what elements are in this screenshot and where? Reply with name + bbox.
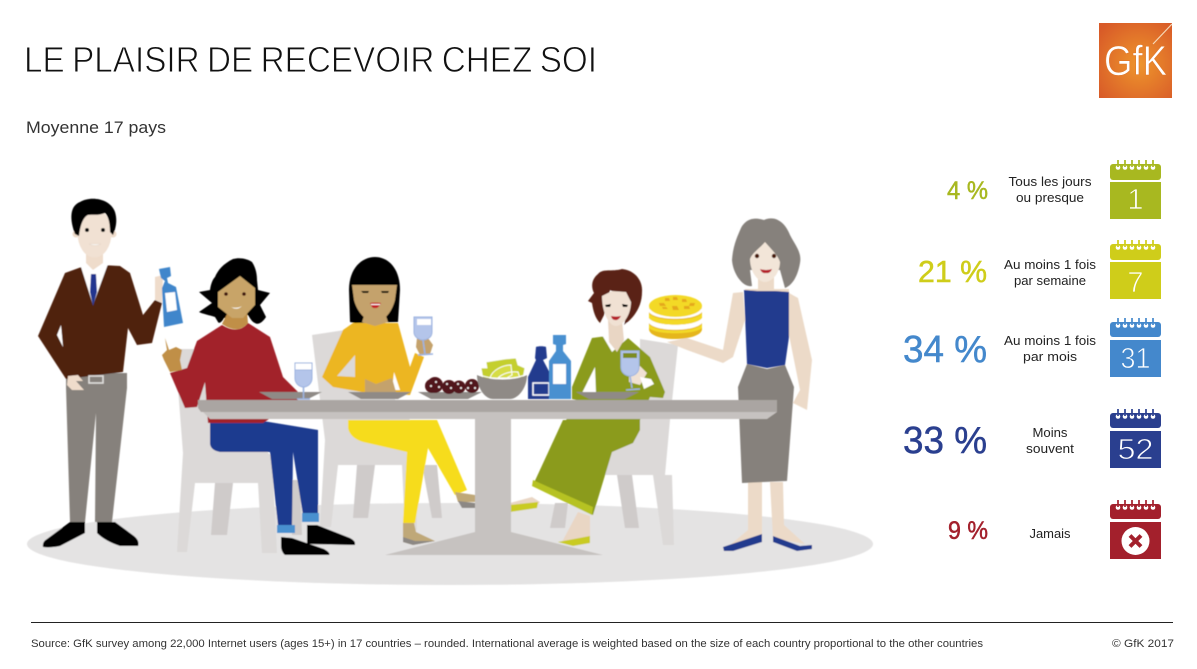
stat row: 34 % au moins 1 fois par mois: Au moins 1 fois	[1004, 333, 1097, 348]
stat row: 4 % tous les jours	[947, 160, 1161, 219]
logo: GfK: GfK	[1104, 37, 1167, 84]
icon: calendar 52	[1110, 409, 1161, 468]
stat row: 33 % moins souvent	[903, 409, 1161, 468]
chair: left back legs	[211, 480, 302, 535]
cake	[649, 295, 702, 339]
stat row: 34 % au moins 1 fois par mois: 34 %	[903, 329, 987, 371]
chair: right back legs	[550, 475, 639, 528]
bottle: dark blue	[528, 346, 554, 399]
icon: calendar cross	[1110, 500, 1161, 559]
icon: calendar 1: 1	[1127, 184, 1144, 216]
illustration: dinner party scene	[27, 199, 873, 585]
floor ellipse	[27, 503, 873, 585]
person: standing woman with cake	[649, 218, 812, 551]
person: woman in green	[510, 269, 665, 546]
stat row: 21 % au moins 1 fois par semaine	[918, 240, 1161, 299]
plates	[259, 392, 639, 399]
stat row: 21 % au moins 1 fois par semaine: Au moins 1 fois	[1004, 257, 1097, 272]
stat row: 9 % jamais: Jamais	[1030, 526, 1071, 541]
person: woman in red sweater	[162, 258, 355, 555]
stat row: 4 % tous les jours: ou presque	[1016, 190, 1084, 205]
person: woman in yellow	[322, 257, 475, 545]
person: standing man with bottle	[38, 199, 183, 547]
icon: calendar 1	[1110, 160, 1161, 219]
logo: GfK	[1099, 23, 1172, 98]
bottle: light blue	[549, 335, 571, 399]
table	[198, 400, 777, 555]
icon: calendar 7: 7	[1127, 267, 1144, 299]
icon: calendar 7	[1110, 240, 1161, 299]
copyright: © GfK 2017	[1112, 638, 1174, 650]
chair: left	[175, 349, 277, 553]
glasses	[295, 317, 640, 399]
stat row: 33 % moins souvent: Moins	[1032, 425, 1068, 440]
stat row: 4 % tous les jours: Tous les jours	[1008, 174, 1092, 189]
stat row: 34 % au moins 1 fois par mois: par mois	[1023, 349, 1078, 364]
subtitle: Moyenne 17 pays	[26, 118, 166, 137]
chair: right	[605, 339, 678, 545]
stat row: 21 % au moins 1 fois par semaine: 21 %	[918, 254, 987, 289]
chair: centre back legs	[353, 465, 442, 518]
stat row: 34 % au moins 1 fois par mois	[903, 318, 1161, 377]
stat row: 4 % tous les jours: 4 %	[947, 177, 988, 205]
stat row: 9 % jamais: 9 %	[948, 517, 988, 545]
stat row: 9 % jamais	[948, 500, 1161, 559]
stat row: 21 % au moins 1 fois par semaine: par semaine	[1014, 273, 1086, 288]
cookies	[425, 377, 479, 394]
icon: calendar 31	[1110, 318, 1161, 377]
source note: Source: GfK survey among 22,000 Internet users (ages 15+) in 17 countries – rounded. International average is weighted based on the size of each country proportional to the other countries	[31, 638, 984, 650]
chair: centre	[312, 330, 417, 530]
bowl with limes	[477, 358, 527, 399]
icon: calendar 52: 52	[1118, 434, 1154, 466]
title: LE PLAISIR DE RECEVOIR CHEZ SOI	[24, 39, 597, 80]
stat row: 33 % moins souvent: 33 %	[903, 420, 987, 462]
icon: calendar 31: 31	[1120, 343, 1150, 375]
stat row: 33 % moins souvent: souvent	[1026, 441, 1074, 456]
